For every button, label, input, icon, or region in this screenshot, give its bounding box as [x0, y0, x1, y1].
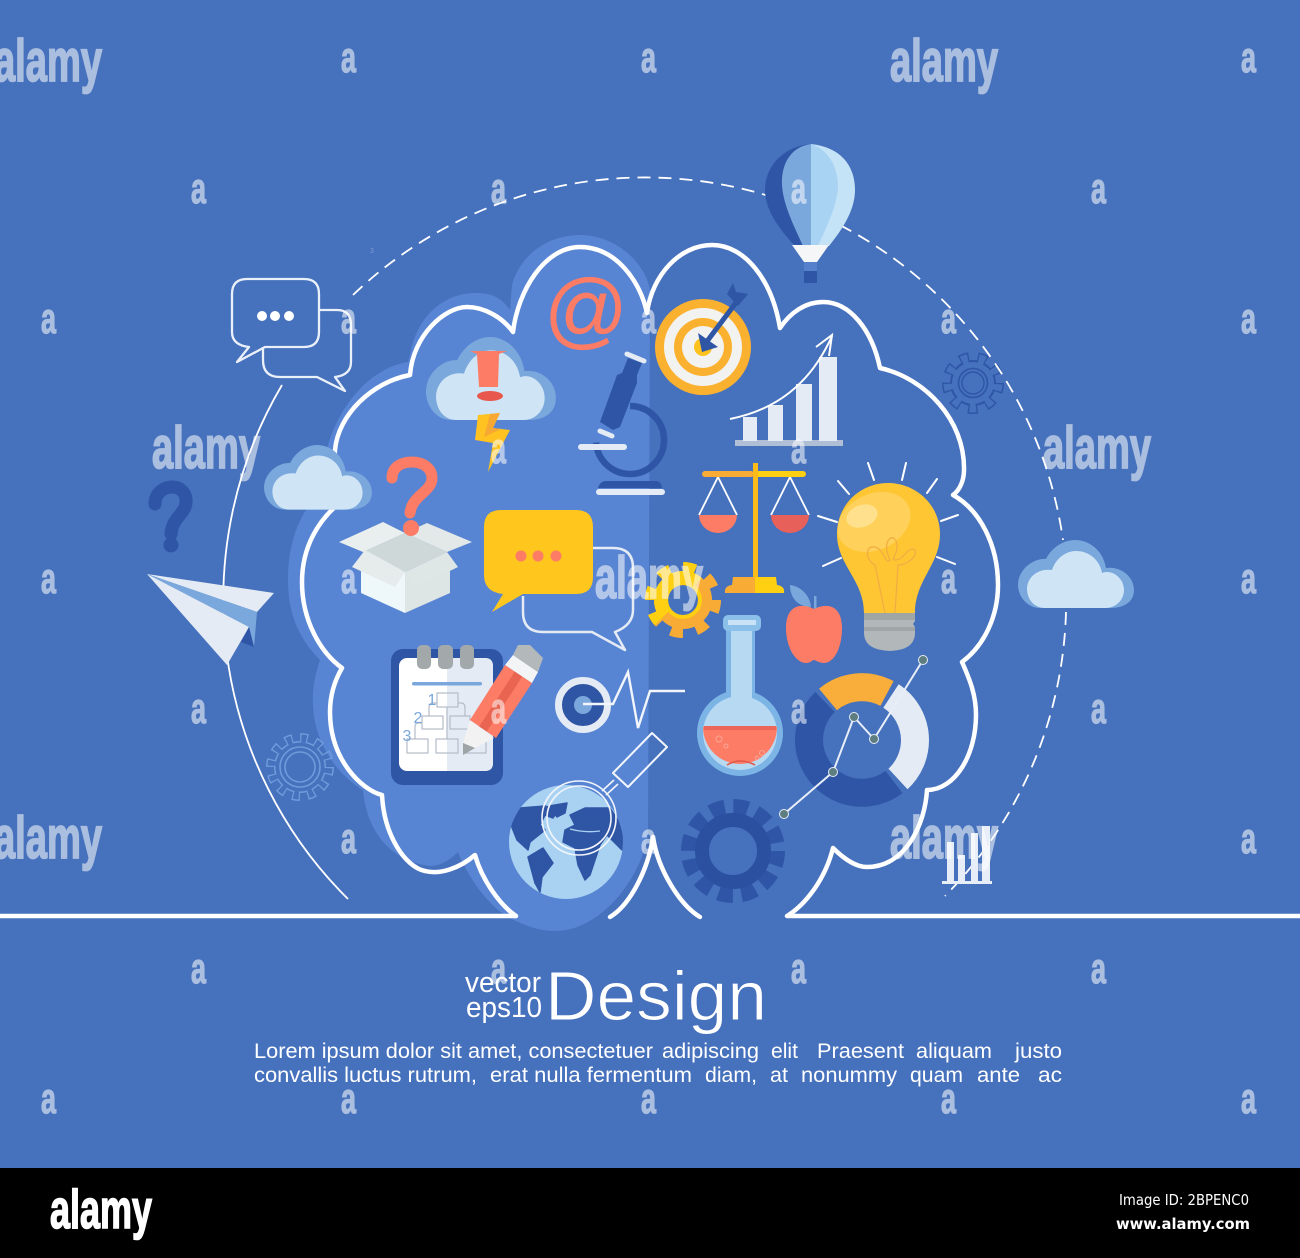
- watermarks: a: [41, 1075, 57, 1123]
- body text block: Lorem ipsum dolor sit amet, consectetuer: [254, 1040, 653, 1063]
- watermarks: a: [1241, 34, 1257, 82]
- body text block: convallis luctus rutrum,: [254, 1064, 477, 1087]
- icon: notebook with flow chart: 1: [428, 692, 437, 709]
- chart: small bar icon: [942, 826, 992, 884]
- icon: globe with magnifier: [509, 733, 667, 899]
- watermarks: a: [341, 1075, 357, 1123]
- footer bar: www.alamy.com: [1116, 1215, 1250, 1233]
- watermarks: a: [1241, 815, 1257, 863]
- tiny stray numeral: 3: [370, 248, 374, 255]
- watermarks: a: [191, 685, 207, 733]
- watermarks: a: [791, 685, 807, 733]
- title: vector eps10 Design: vector: [465, 967, 541, 999]
- icon: white chat bubble outline: [523, 548, 633, 650]
- icon: open box with question mark: [339, 462, 472, 613]
- body text block: nonummy: [801, 1064, 898, 1087]
- watermarks: a: [41, 555, 57, 603]
- watermarks: a: [641, 815, 657, 863]
- chart: growth bars with arrow: [730, 335, 843, 446]
- watermarks: alamy: [890, 805, 998, 871]
- dashed orbit arc top: [353, 177, 1063, 540]
- body text block: aliquam: [916, 1040, 992, 1063]
- body text block: Praesent: [817, 1040, 904, 1063]
- icon: yellow gear: [651, 568, 715, 632]
- watermarks: a: [491, 425, 507, 473]
- watermarks: a: [41, 295, 57, 343]
- watermarks: a: [491, 165, 507, 213]
- icon: pulse target: [558, 672, 685, 730]
- body text block: ante: [977, 1064, 1020, 1087]
- icon: flask: [697, 615, 783, 776]
- watermarks: a: [341, 34, 357, 82]
- icon: paper plane: [147, 574, 274, 665]
- watermarks: a: [341, 295, 357, 343]
- icon: outline chat bubbles: [232, 279, 351, 391]
- footer bar: [0, 1168, 1300, 1258]
- watermarks: a: [791, 165, 807, 213]
- chart: donut chart: [809, 687, 915, 793]
- watermarks: a: [1091, 165, 1107, 213]
- body text block: [254, 1040, 1062, 1087]
- watermarks: alamy: [152, 415, 260, 481]
- brain outline with ground line: [0, 245, 1300, 916]
- footer bar: alamy: [50, 1178, 152, 1240]
- icon: outline gear top right: [942, 352, 1004, 414]
- body text block: at: [770, 1064, 788, 1087]
- watermarks: alamy: [890, 28, 998, 94]
- body text block: erat nulla fermentum: [490, 1064, 692, 1087]
- watermarks: a: [941, 1075, 957, 1123]
- icon: dark question mark: [155, 487, 186, 552]
- icon: pencil: [463, 645, 543, 755]
- icon: outline gear bottom left: [266, 733, 334, 801]
- watermarks: a: [491, 685, 507, 733]
- icon: dark gear: [689, 807, 777, 895]
- watermarks: a: [941, 555, 957, 603]
- watermarks: a: [1241, 295, 1257, 343]
- watermarks: a: [191, 945, 207, 993]
- watermarks: a: [491, 945, 507, 993]
- title: vector eps10 Design: Design: [545, 957, 767, 1035]
- watermarks: a: [341, 815, 357, 863]
- icon: notebook with flow chart: [391, 645, 503, 785]
- icon: light bulb: [818, 463, 958, 651]
- watermarks: a: [1091, 685, 1107, 733]
- chart: line chart over donut: [780, 656, 928, 818]
- watermarks: a: [641, 295, 657, 343]
- watermarks: a: [1091, 945, 1107, 993]
- icon: right cloud: [1018, 540, 1134, 608]
- solid orbit arc left: [223, 385, 348, 899]
- icon: microscope: [578, 354, 665, 495]
- icon: hot air balloon: [765, 144, 855, 283]
- body text block: elit: [771, 1040, 798, 1063]
- watermarks: a: [941, 295, 957, 343]
- watermarks: a: [641, 34, 657, 82]
- dashed orbit arc bottom right: [945, 612, 1066, 896]
- watermarks: a: [341, 555, 357, 603]
- watermarks: a: [641, 1075, 657, 1123]
- watermarks: a: [1241, 1075, 1257, 1123]
- icon: target with arrow: [655, 283, 751, 395]
- panel: left brain hemisphere: [288, 235, 650, 931]
- body text block: ac: [1038, 1064, 1062, 1087]
- title: vector eps10 Design: eps10: [466, 992, 542, 1024]
- icon: at sign: @: [544, 262, 628, 356]
- body text block: adipiscing: [662, 1040, 759, 1063]
- icon: cloud with exclamation and lightning: [426, 337, 556, 472]
- icon: red apple: [786, 585, 842, 663]
- watermarks: a: [791, 425, 807, 473]
- icon: notebook with flow chart: 3: [403, 728, 412, 745]
- body text block: justo: [1014, 1040, 1062, 1063]
- watermarks: alamy: [595, 545, 703, 611]
- brain centre notch outline: [610, 837, 700, 917]
- body text block: diam,: [705, 1064, 757, 1087]
- icon: left cloud: [264, 445, 372, 510]
- footer bar: Image ID: 2BPENC0: [1119, 1191, 1249, 1209]
- icon: yellow speech bubble: [484, 510, 593, 612]
- watermarks: a: [191, 165, 207, 213]
- watermarks: a: [1241, 555, 1257, 603]
- watermarks: a: [791, 945, 807, 993]
- body text block: quam: [910, 1064, 963, 1087]
- icon: notebook with flow chart: 2: [414, 710, 423, 727]
- icon: balance scales: [699, 463, 809, 593]
- watermarks: alamy: [1043, 415, 1151, 481]
